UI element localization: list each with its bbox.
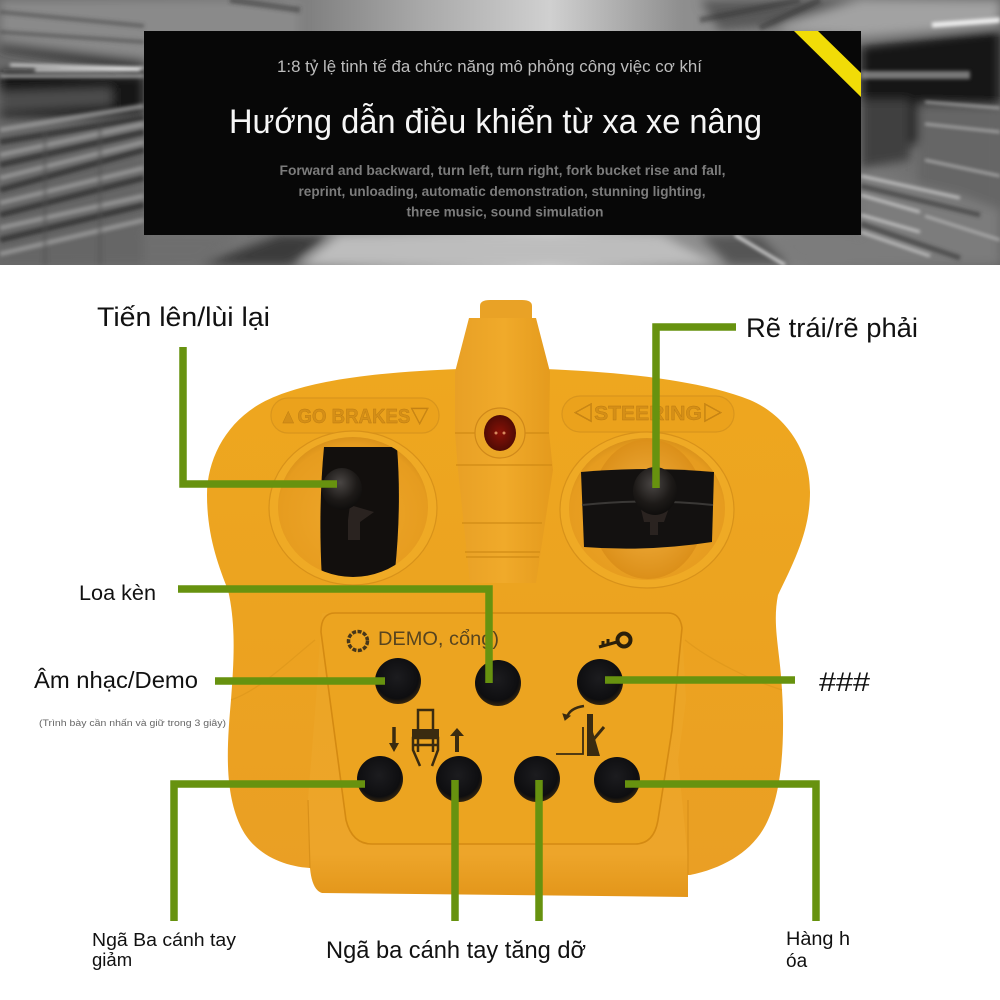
demo icon bbox=[348, 632, 368, 650]
header dark panel bbox=[144, 31, 861, 235]
buttons bbox=[357, 658, 640, 803]
label: turn: Rẽ trái/rẽ phải bbox=[746, 313, 918, 343]
label: unload bbox=[786, 929, 850, 972]
yellow corner stripe bbox=[794, 31, 861, 97]
centre antenna stick bbox=[455, 318, 553, 583]
label plate: STEERING: ◁STEERING▷ bbox=[573, 403, 723, 425]
label: arm down bbox=[92, 929, 237, 970]
button panel recess bbox=[321, 613, 682, 844]
label: arm down: Ngã Ba cánh tay bbox=[92, 929, 237, 950]
header photo streaks bbox=[0, 0, 1000, 265]
black roller bbox=[320, 447, 399, 580]
label: arm down: giảm bbox=[92, 949, 132, 970]
note: demo hold: (Trình bày cần nhấn và giữ trong 3 giây) bbox=[39, 718, 226, 729]
label: horn: Loa kèn bbox=[79, 582, 156, 605]
left stick housing bbox=[269, 398, 439, 585]
right knob bbox=[633, 467, 677, 535]
demo label: DEMO, cổng) bbox=[378, 629, 499, 650]
fork lift up-down icon bbox=[389, 710, 464, 766]
english description: reprint, unloading, automatic demonstration, stunning lighting, bbox=[298, 184, 706, 199]
button flap bbox=[308, 613, 688, 897]
label plate: STEERING bbox=[562, 396, 734, 432]
tilt and fork icon bbox=[556, 706, 604, 756]
label plate: GO BRAKES: ▲GO BRAKES▽ bbox=[279, 406, 429, 428]
left knob bbox=[322, 468, 374, 540]
label: hash: ### bbox=[819, 667, 870, 697]
controller body bbox=[207, 369, 810, 875]
controller top nub bbox=[480, 300, 532, 318]
label: forward/back: Tiến lên/lùi lại bbox=[97, 302, 270, 332]
english description bbox=[280, 163, 726, 220]
label plate: GO BRAKES bbox=[271, 398, 439, 433]
green leader lines bbox=[174, 327, 816, 921]
right stick housing bbox=[560, 396, 734, 588]
title: Hướng dẫn điều khiển từ xa xe nâng bbox=[229, 103, 762, 141]
black roller bbox=[581, 469, 714, 549]
label: arm up: Ngã ba cánh tay tăng dỡ bbox=[326, 937, 586, 964]
key icon bbox=[599, 634, 630, 647]
label: unload: Hàng h bbox=[786, 929, 850, 950]
english description: three music, sound simulation bbox=[406, 204, 604, 220]
label: music/demo: Âm nhạc/Demo bbox=[34, 667, 198, 693]
label: unload: óa bbox=[786, 951, 808, 972]
red LED bbox=[475, 408, 525, 458]
english description: Forward and backward, turn left, turn right, fork bucket rise and fall, bbox=[280, 163, 726, 178]
header photo background: blurred warehouse bbox=[0, 0, 1000, 265]
callout labels bbox=[34, 302, 918, 972]
subtitle: 1:8 tỷ lệ tinh tế đa chức năng mô phỏng công việc cơ khí bbox=[277, 58, 702, 76]
remote controller bbox=[207, 300, 810, 897]
